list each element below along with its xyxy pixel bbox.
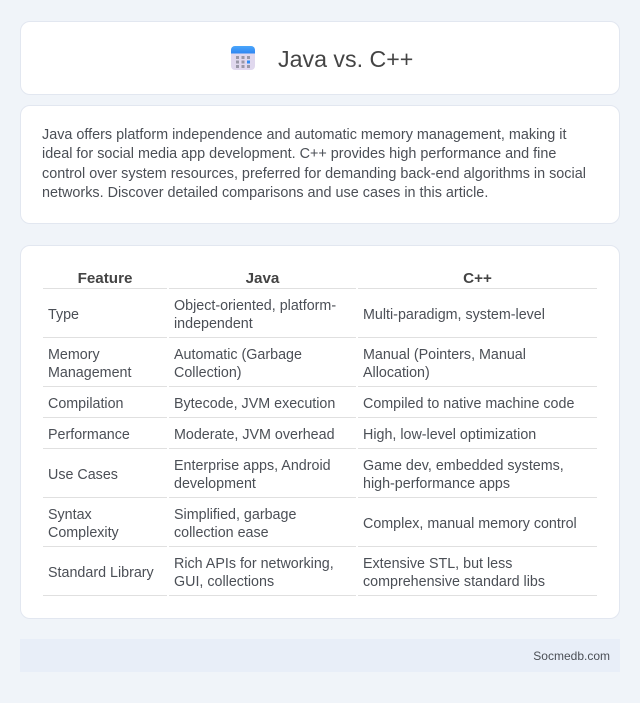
intro text: Java offers platform independence and automatic memory management, making it: [42, 126, 566, 142]
row: use cases: Game dev, embedded systems,: [363, 458, 564, 474]
table header: Feature: [78, 270, 132, 287]
row: use cases: Use Cases: [48, 467, 118, 483]
row: type: Type: [48, 307, 79, 323]
row: syntax complexity: collection ease: [174, 525, 269, 541]
row: standard library: Rich APIs for networking,: [174, 556, 334, 572]
row: compilation: Compilation: [48, 396, 124, 412]
panel: header: [20, 21, 620, 95]
table header: Java: [246, 270, 279, 287]
panel: comparison table: [20, 245, 620, 619]
intro text: [42, 126, 586, 201]
row: compilation: Bytecode, JVM execution: [174, 396, 335, 412]
row: compilation: Compiled to native machine code: [363, 396, 574, 412]
footer credit: Socmedb.com: [533, 649, 610, 663]
row: memory management: Collection): [174, 365, 242, 381]
row: use cases: [48, 458, 564, 492]
intro text: networks. Discover detailed comparisons and use cases in this article.: [42, 185, 488, 201]
row: standard library: Extensive STL, but less: [363, 556, 512, 572]
footer bar: [20, 639, 620, 672]
title: Java vs. C++: [278, 46, 413, 72]
table header: [78, 270, 492, 287]
table header: C++: [463, 270, 492, 287]
comparison table: [43, 270, 597, 596]
row: memory management: Management: [48, 365, 131, 381]
row: use cases: development: [174, 476, 256, 492]
row: standard library: Standard Library: [48, 565, 154, 581]
row: standard library: [48, 556, 545, 590]
row: standard library: GUI, collections: [174, 574, 274, 590]
panel: introduction: [20, 105, 620, 224]
row: syntax complexity: [48, 507, 577, 541]
row: performance: Performance: [48, 427, 130, 443]
row: syntax complexity: Simplified, garbage: [174, 507, 296, 523]
row: memory management: [48, 347, 526, 381]
intro text: control over system resources, preferred for demanding back-end algorithms in social: [42, 166, 586, 182]
row: syntax complexity: Complexity: [48, 525, 119, 541]
row: memory management: Automatic (Garbage: [174, 347, 302, 363]
row: performance: High, low-level optimization: [363, 427, 536, 443]
icon: calendar: [231, 46, 255, 70]
row: memory management: Manual (Pointers, Manual: [363, 347, 526, 363]
intro text: ideal for social media app development. C++ provides high performance and fine: [42, 146, 556, 162]
row: compilation: [48, 396, 574, 412]
row: performance: [48, 427, 536, 443]
row: type: Object-oriented, platform-: [174, 298, 336, 314]
row: type: [48, 298, 545, 332]
row: syntax complexity: Syntax: [48, 507, 92, 523]
row: type: independent: [174, 316, 253, 332]
row: use cases: high-performance apps: [363, 476, 510, 492]
row: use cases: Enterprise apps, Android: [174, 458, 331, 474]
row: memory management: Allocation): [363, 365, 430, 381]
row: performance: Moderate, JVM overhead: [174, 427, 335, 443]
row: standard library: comprehensive standard libs: [363, 574, 545, 590]
row: type: Multi-paradigm, system-level: [363, 307, 545, 323]
row: memory management: Memory: [48, 347, 100, 363]
row: syntax complexity: Complex, manual memory control: [363, 516, 577, 532]
